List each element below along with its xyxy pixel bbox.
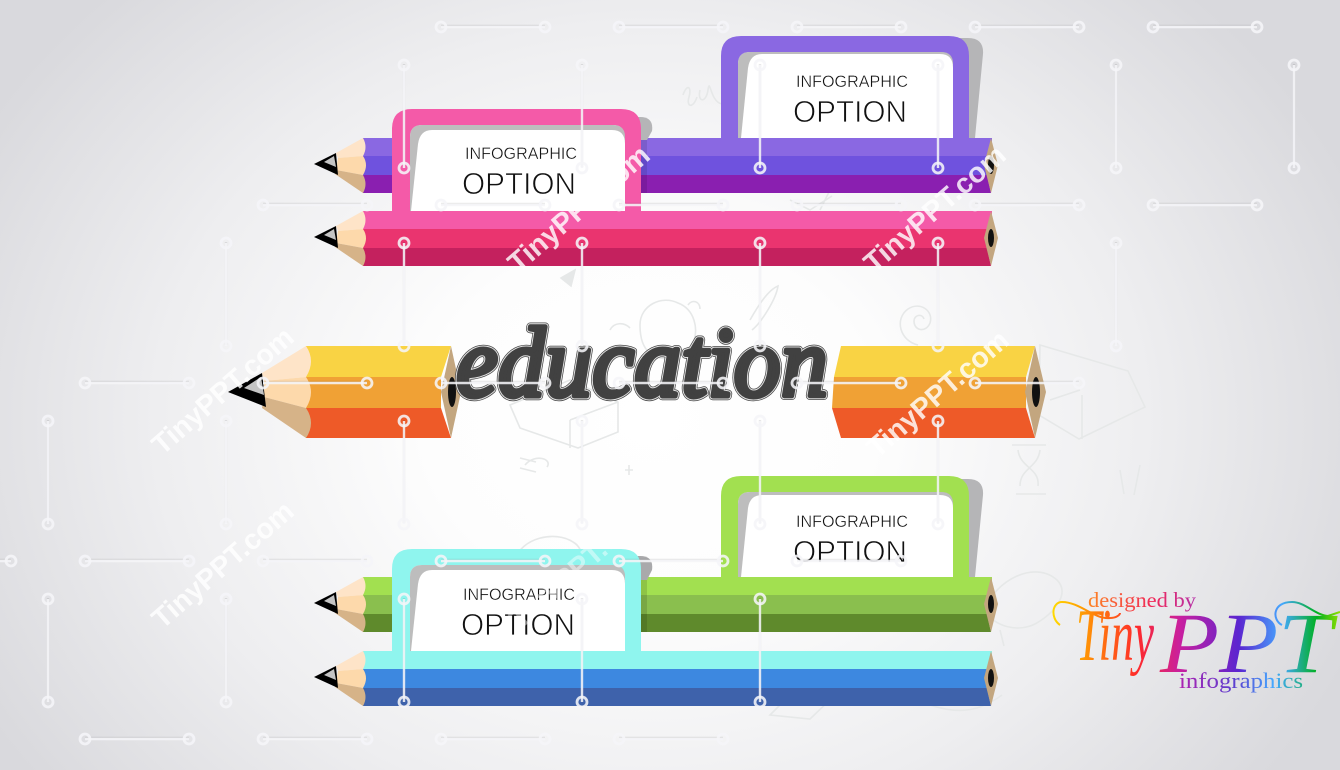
option text: cyan: INFOGRAPHIC [463,586,575,604]
watermarks: TinyPPT.com [146,321,300,461]
option text: green [793,513,908,569]
watermarks: TinyPPT.com [861,324,1015,464]
option text: purple: INFOGRAPHIC [796,73,908,91]
education script word: education [456,307,828,418]
option text: purple [793,73,908,129]
watermarks: TinyPPT.com [504,495,658,635]
watermarks [146,139,1015,635]
option text: cyan: OPTION [461,607,575,642]
option text: green: OPTION [793,534,907,569]
background doodles [510,86,1145,719]
option text: pink [462,145,577,201]
option text: pink: INFOGRAPHIC [465,145,577,163]
education script word: education [456,307,828,418]
option text: green: INFOGRAPHIC [796,513,908,531]
tab: pink with option card [392,109,652,213]
logo: designed by TinyPPT infographics: designed by [1088,588,1197,612]
pencil: green [314,577,998,632]
logo: designed by TinyPPT infographics: infographics [1179,668,1303,693]
logo: designed by TinyPPT infographics: Tiny [1076,595,1154,677]
right large yellow pencil [832,346,1046,438]
option text: cyan [461,586,575,642]
pencil: blue [314,577,998,706]
tab: purple with option card [721,36,983,140]
watermarks: TinyPPT.com [502,139,656,279]
education script word: education [456,307,828,418]
watermarks: TinyPPT.com [858,139,1012,279]
watermarks: TinyPPT.com [146,495,300,635]
tab: green with option card [721,476,983,579]
tab: cyan with option card [392,549,652,653]
option text: pink: OPTION [462,166,576,201]
pencil: pink [314,138,998,266]
left large yellow pencil [228,346,461,438]
pencil: purple [314,138,998,193]
option text: purple: OPTION [793,94,907,129]
logo: designed by TinyPPT infographics: PPT [1159,595,1338,691]
logo: designed by TinyPPT infographics [1053,588,1340,693]
